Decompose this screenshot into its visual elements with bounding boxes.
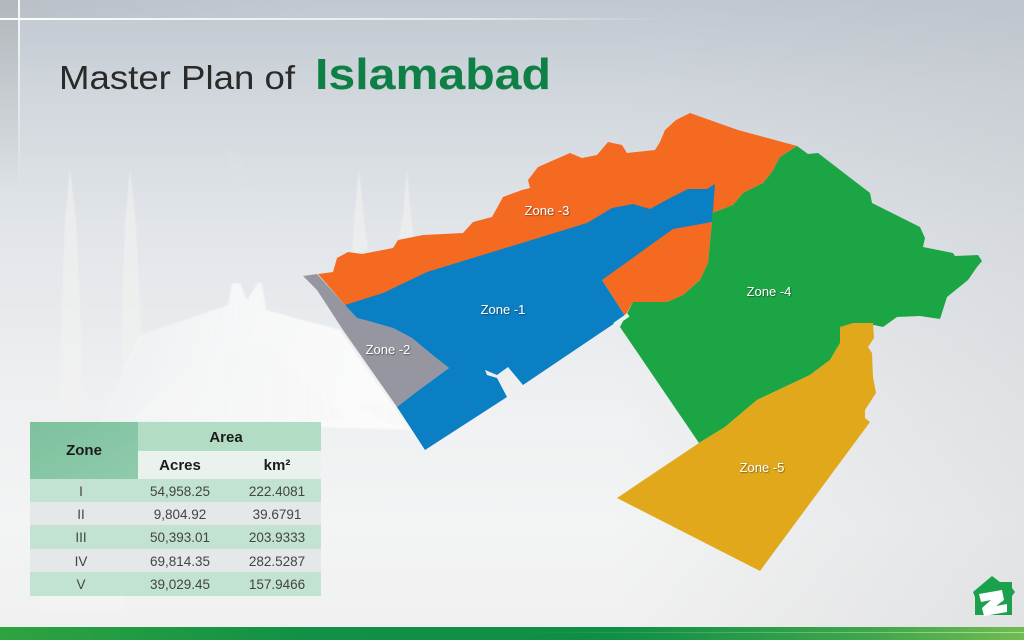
small white boundary label <box>613 313 630 326</box>
row II: 39.6791 <box>253 507 301 522</box>
label: Zone -2: Zone -2 <box>366 342 410 357</box>
row II: II <box>77 507 85 522</box>
title <box>59 50 551 99</box>
row III: III <box>75 530 87 545</box>
table header: km² <box>264 457 290 474</box>
row I: 54,958.25 <box>150 484 210 499</box>
row IV <box>30 549 321 572</box>
area table <box>30 422 321 596</box>
zone 1 region <box>345 184 715 450</box>
zone 4 region <box>620 146 982 443</box>
row III: 203.9333 <box>249 530 305 545</box>
label: Zone -1: Zone -1 <box>481 302 525 317</box>
row II <box>30 502 321 525</box>
label: Zone -4: Zone -4 <box>747 284 791 299</box>
row III: 50,393.01 <box>150 530 210 545</box>
row V: 39,029.45 <box>150 577 210 592</box>
row IV: 69,814.35 <box>150 554 210 569</box>
row II: 9,804.92 <box>154 507 206 522</box>
zone 2 region <box>303 274 449 407</box>
icon: green house logo with Z <box>973 576 1015 616</box>
table header: Zone <box>66 442 102 459</box>
zone 3 region <box>318 113 797 316</box>
table header: Acres <box>159 457 201 474</box>
label: Zone -5: Zone -5 <box>740 460 784 475</box>
background: white corner lines <box>0 0 670 190</box>
label: Zone -3: Zone -3 <box>525 203 569 218</box>
row V: V <box>76 577 86 592</box>
background: faint mosque silhouette <box>40 150 640 610</box>
row I <box>30 479 321 502</box>
table header: Area <box>209 429 243 446</box>
title: Master Plan of: Master Plan of <box>59 59 296 96</box>
row IV: 282.5287 <box>249 554 305 569</box>
title: Islamabad: Islamabad <box>315 50 551 99</box>
row IV: IV <box>75 554 87 569</box>
zone 5 region <box>617 323 876 571</box>
table header <box>30 422 321 479</box>
row V: 157.9466 <box>249 577 305 592</box>
row I: 222.4081 <box>249 484 305 499</box>
row V <box>30 572 321 596</box>
map of Islamabad zones <box>303 113 982 571</box>
bottom green bar <box>0 627 1024 640</box>
row I: I <box>79 484 83 499</box>
row III <box>30 525 321 549</box>
